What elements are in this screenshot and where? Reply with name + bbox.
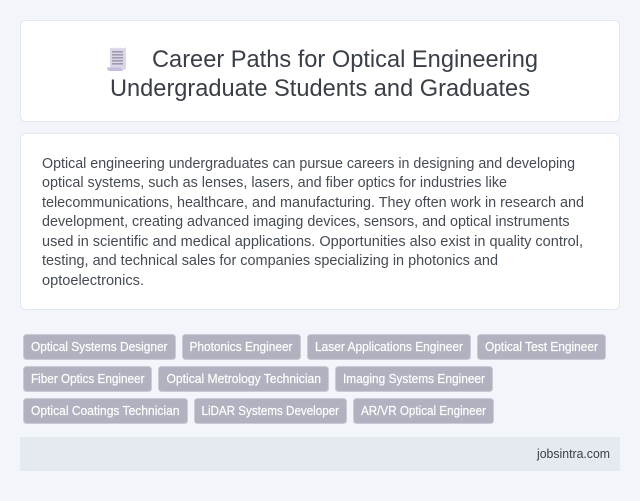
- text block: description: telecommunications, healthcare, and manufacturing. They often work in research and: [42, 195, 584, 211]
- tag: Imaging Systems Engineer: [336, 366, 492, 392]
- text block: description: Optical engineering undergraduates can pursue careers in designing and developing: [42, 156, 575, 172]
- tag: Optical Metrology Technician: [158, 366, 328, 392]
- title: [110, 46, 538, 102]
- footer: [20, 437, 620, 471]
- tag: Optical Test Engineer: [478, 334, 606, 360]
- tag: LiDAR Systems Developer: LiDAR Systems Developer: [202, 404, 339, 418]
- tag: Optical Systems Designer: Optical Systems Designer: [31, 340, 168, 354]
- text block: description: testing, and technical sales for companies specializing in photonics and: [42, 253, 498, 269]
- text block: description: development, creating advanced imaging devices, sensors, and optical instruments: [42, 214, 570, 230]
- tag: Optical Metrology Technician: Optical Metrology Technician: [166, 372, 321, 386]
- tag: Optical Systems Designer: [24, 334, 176, 360]
- panel: title card: [20, 20, 620, 122]
- tag: Optical Coatings Technician: [24, 398, 188, 424]
- text block: description: [42, 156, 584, 289]
- text block: description: optoelectronics.: [42, 273, 144, 289]
- tag: Laser Applications Engineer: Laser Applications Engineer: [315, 340, 463, 354]
- tag: Imaging Systems Engineer: Imaging Systems Engineer: [343, 372, 485, 386]
- tag: Fiber Optics Engineer: [24, 366, 152, 392]
- title: Career Paths for Optical Engineering: [152, 46, 538, 73]
- tag: Optical Test Engineer: Optical Test Engineer: [485, 340, 598, 354]
- panel: description card: [20, 134, 620, 310]
- title: Undergraduate Students and Graduates: [110, 75, 530, 102]
- tag: AR/VR Optical Engineer: [354, 398, 494, 424]
- tag: AR/VR Optical Engineer: AR/VR Optical Engineer: [361, 404, 486, 418]
- text block: description: used in scientific and medical applications. Opportunities also exist in quality control,: [42, 234, 583, 250]
- tag: Optical Coatings Technician: Optical Coatings Technician: [31, 404, 180, 418]
- icon: document scroll: [107, 48, 126, 71]
- tag: Photonics Engineer: Photonics Engineer: [190, 340, 292, 354]
- tag: Laser Applications Engineer: [308, 334, 470, 360]
- tag: Photonics Engineer: [182, 334, 300, 360]
- text block: description: optical systems, such as lenses, lasers, and fiber optics for industries like: [42, 175, 507, 191]
- tag: Fiber Optics Engineer: Fiber Optics Engineer: [31, 372, 144, 386]
- tag: LiDAR Systems Developer: [194, 398, 346, 424]
- career tags: [24, 334, 606, 424]
- footer source text: jobsintra.com: [536, 447, 610, 461]
